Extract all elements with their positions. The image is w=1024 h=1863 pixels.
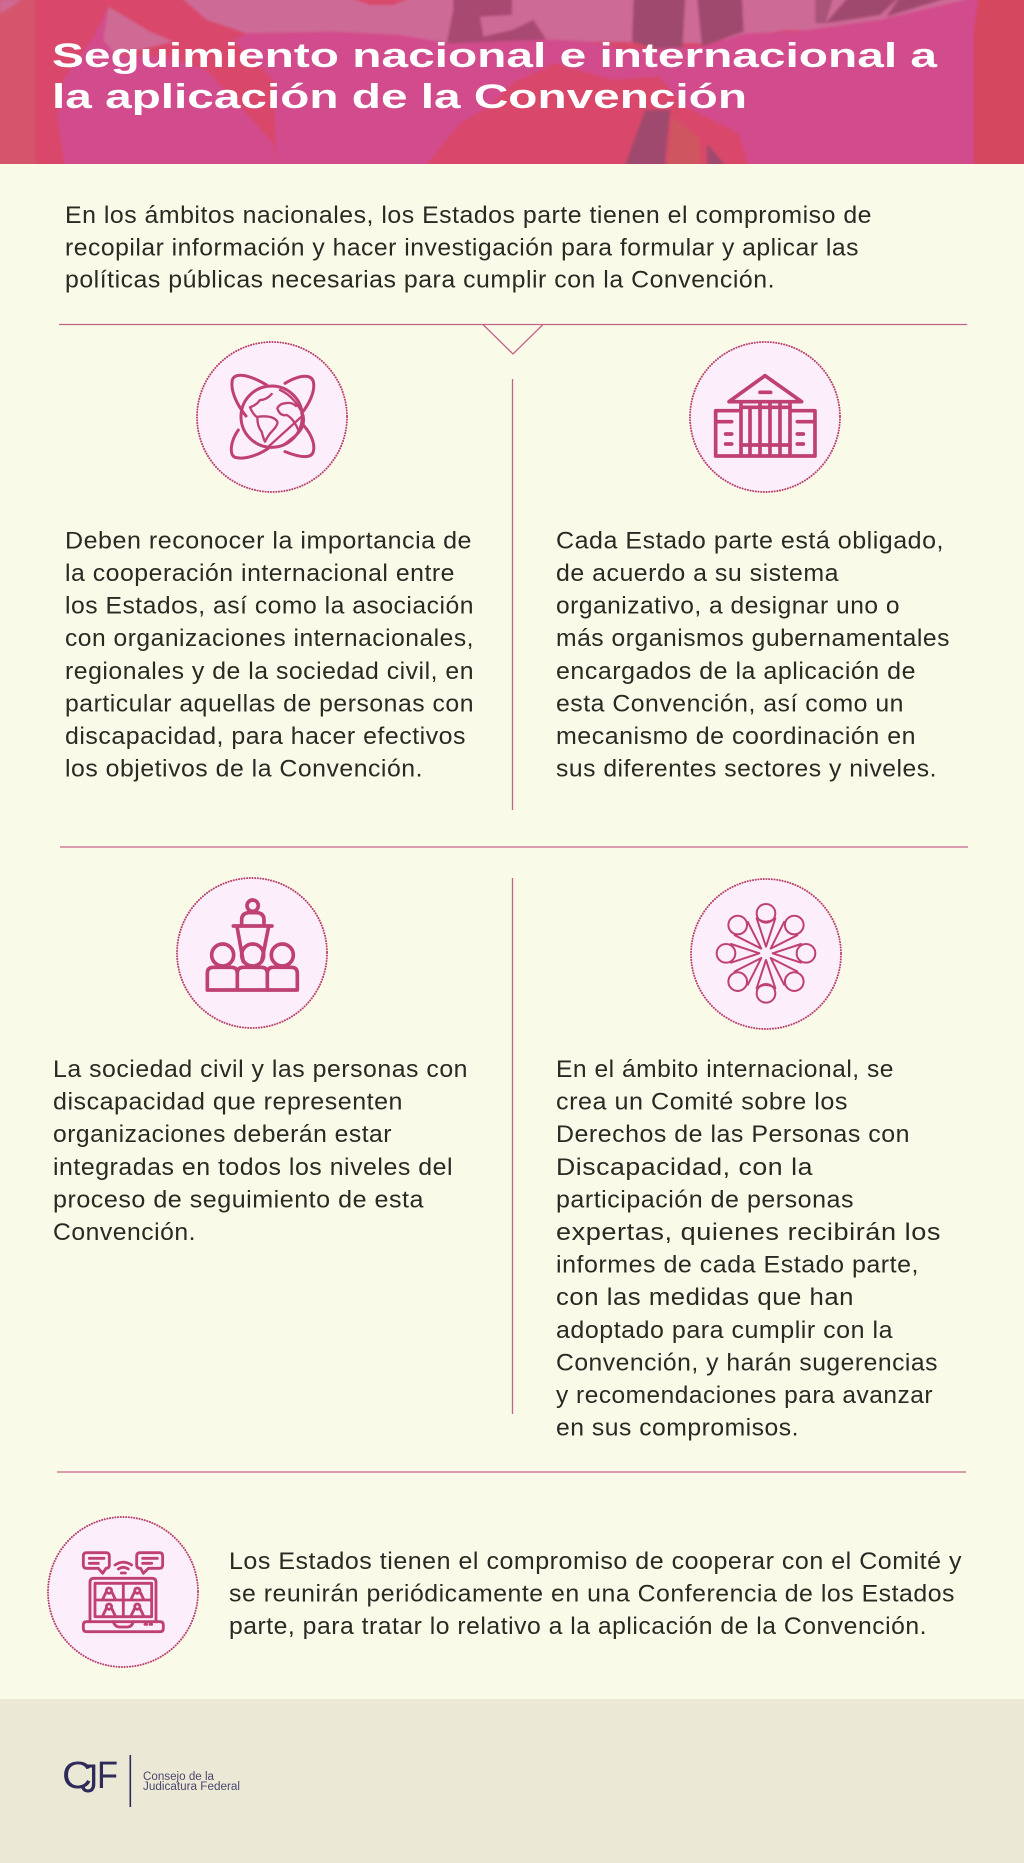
header banner bbox=[0, 0, 1024, 177]
intro text: En los ámbitos nacionales, los Estados parte tienen el compromiso de bbox=[65, 202, 872, 229]
icon: audience and podium bbox=[177, 878, 327, 1028]
title: la aplicación de la Convención bbox=[52, 78, 747, 116]
text: Conferencia de los Estados parte bbox=[229, 1548, 962, 1640]
text: sociedad civil: discapacidad que representen bbox=[53, 1089, 403, 1116]
text: cooperación internacional: con organizaciones internacionales, bbox=[65, 625, 474, 652]
text: organismos gubernamentales: de acuerdo a su sistema bbox=[556, 560, 839, 587]
text: Comité internacional: informes de cada Estado parte, bbox=[556, 1252, 919, 1279]
text: organismos gubernamentales: más organismos gubernamentales bbox=[556, 625, 950, 652]
text: Comité internacional bbox=[556, 1056, 941, 1442]
text: Conferencia de los Estados parte: parte, para tratar lo relativo a la aplicación de la Convención. bbox=[229, 1613, 927, 1640]
text: sociedad civil: Convención. bbox=[53, 1219, 196, 1246]
icon: laptop video conference bbox=[48, 1517, 198, 1667]
text: cooperación internacional: los objetivos de la Convención. bbox=[65, 756, 423, 783]
text: sociedad civil: integradas en todos los niveles del bbox=[53, 1154, 453, 1181]
text: cooperación internacional bbox=[65, 528, 474, 783]
title bbox=[52, 37, 939, 116]
text: Comité internacional: en sus compromisos. bbox=[556, 1415, 799, 1442]
footer band bbox=[0, 1699, 1024, 1863]
text: Comité internacional: En el ámbito internacional, se bbox=[556, 1056, 894, 1083]
text: organismos gubernamentales: encargados de la aplicación de bbox=[556, 658, 916, 685]
text: organismos gubernamentales: mecanismo de coordinación en bbox=[556, 723, 916, 750]
text: organismos gubernamentales: Cada Estado parte está obligado, bbox=[556, 528, 944, 554]
logo CJF: F bbox=[97, 1755, 118, 1797]
icon: government building bbox=[690, 342, 840, 492]
intro text: políticas públicas necesarias para cumplir con la Convención. bbox=[65, 267, 775, 294]
text: Comité internacional: Derechos de las Personas con bbox=[556, 1121, 910, 1148]
text: cooperación internacional: regionales y de la sociedad civil, en bbox=[65, 658, 474, 685]
text: Comité internacional: con las medidas que han bbox=[556, 1284, 854, 1311]
logo CJF: Judicatura Federal bbox=[143, 1781, 240, 1793]
text: cooperación internacional: los Estados, así como la asociación bbox=[65, 593, 474, 620]
logo CJF: C bbox=[62, 1755, 92, 1797]
text: Conferencia de los Estados parte: se reunirán periódicamente en una Conferencia de los Estados bbox=[229, 1581, 955, 1608]
text: sociedad civil: proceso de seguimiento de esta bbox=[53, 1186, 424, 1213]
text: sociedad civil bbox=[53, 1056, 468, 1246]
icon: globe with orbits bbox=[197, 342, 347, 492]
logo CJF: Consejo de la bbox=[143, 1771, 215, 1783]
text: Conferencia de los Estados parte: Los Estados tienen el compromiso de cooperar con el Comité y bbox=[229, 1548, 962, 1575]
text: organismos gubernamentales: organizativo, a designar uno o bbox=[556, 593, 900, 620]
text: Comité internacional: Discapacidad, con la bbox=[556, 1154, 813, 1181]
logo CJF bbox=[62, 1755, 240, 1807]
logo CJF: J bbox=[80, 1757, 98, 1801]
text: organismos gubernamentales: esta Convención, así como un bbox=[556, 690, 904, 717]
title: Seguimiento nacional e internacional a bbox=[52, 37, 939, 75]
text: Comité internacional: y recomendaciones para avanzar bbox=[556, 1382, 933, 1409]
icon: eight people circle bbox=[691, 879, 841, 1029]
top divider with notch bbox=[59, 324, 967, 354]
text: sociedad civil: La sociedad civil y las personas con bbox=[53, 1056, 468, 1083]
text: sociedad civil: organizaciones deberán estar bbox=[53, 1121, 392, 1148]
text: organismos gubernamentales: sus diferentes sectores y niveles. bbox=[556, 756, 937, 783]
text: cooperación internacional: particular aquellas de personas con bbox=[65, 690, 474, 717]
text: Comité internacional: Convención, y harán sugerencias bbox=[556, 1349, 938, 1376]
intro text: recopilar información y hacer investigación para formular y aplicar las bbox=[65, 234, 859, 261]
text: Comité internacional: participación de personas bbox=[556, 1186, 854, 1213]
text: cooperación internacional: discapacidad, para hacer efectivos bbox=[65, 723, 466, 750]
text: Comité internacional: expertas, quienes recibirán los bbox=[556, 1219, 941, 1246]
text: cooperación internacional: la cooperación internacional entre bbox=[65, 560, 455, 587]
intro text bbox=[65, 202, 872, 294]
text: Comité internacional: adoptado para cumplir con la bbox=[556, 1317, 893, 1344]
text: cooperación internacional: Deben reconocer la importancia de bbox=[65, 528, 472, 554]
text: Comité internacional: crea un Comité sobre los bbox=[556, 1089, 848, 1116]
text: organismos gubernamentales bbox=[556, 528, 950, 783]
